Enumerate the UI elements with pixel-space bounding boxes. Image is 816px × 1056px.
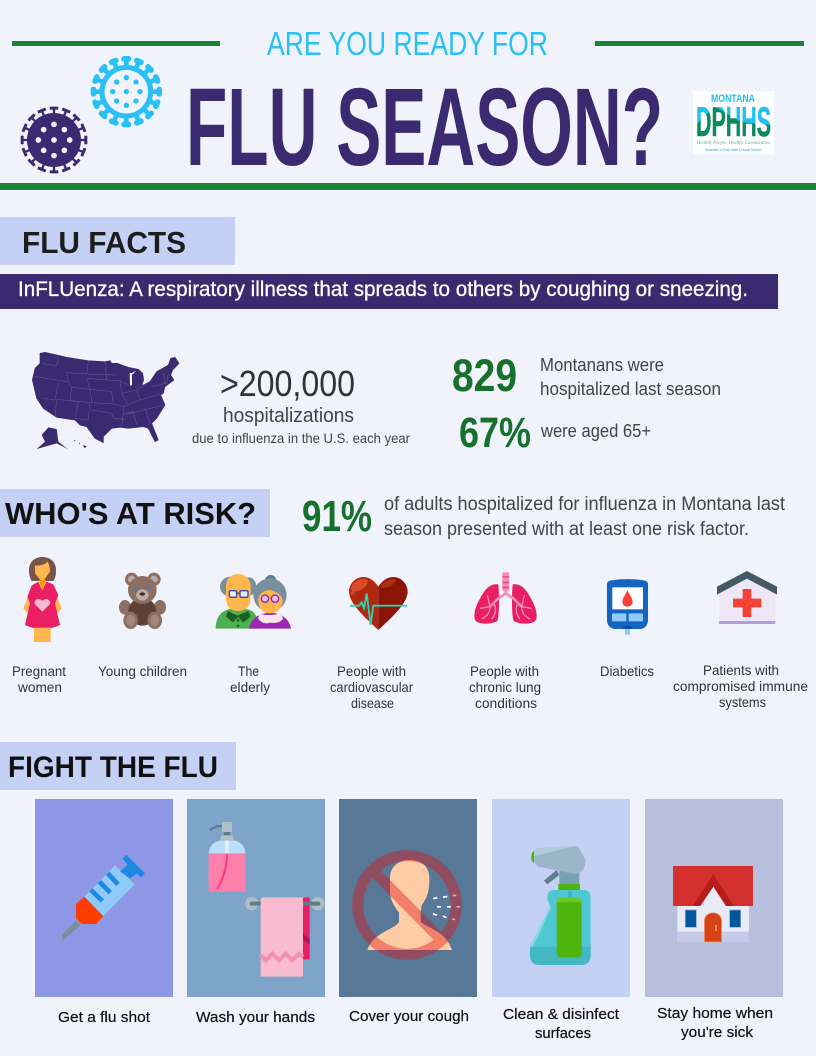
card: wash hands xyxy=(187,799,325,1026)
caption: surfaces xyxy=(535,1025,591,1042)
caption: Wash your hands xyxy=(196,1009,315,1026)
stat: 91 percent: 91% xyxy=(302,492,372,541)
caption: Cover your cough xyxy=(349,1008,469,1025)
stat: 829 Montanans: 829 xyxy=(452,350,517,401)
stat: 91 percent: season presented with at least one risk factor. xyxy=(384,519,749,540)
stat: 67 percent: were aged 65+ xyxy=(540,421,651,441)
logo: Montana DPHHS: MONTANA xyxy=(711,93,755,105)
icon: no coughing xyxy=(358,856,460,954)
labels: risk groups: chronic lung xyxy=(469,679,541,695)
title kicker: ARE YOU READY FOR xyxy=(267,25,548,62)
labels: risk groups xyxy=(12,662,808,711)
caption: Clean & disinfect xyxy=(503,1006,620,1023)
card: flu shot xyxy=(35,799,173,1026)
card: cover cough xyxy=(339,799,477,1025)
icon: house xyxy=(673,866,753,942)
heading: who's at risk: WHO'S AT RISK? xyxy=(5,496,256,531)
stat: 67 percent: 67% xyxy=(459,409,531,457)
stat: 91 percent xyxy=(302,492,786,541)
panel: flu facts xyxy=(0,217,778,457)
icon: elderly couple xyxy=(216,574,291,629)
heading: flu facts: FLU FACTS xyxy=(22,225,186,260)
labels: risk groups: women xyxy=(17,679,62,695)
labels: risk groups: Diabetics xyxy=(600,663,654,679)
logo: Montana DPHHS xyxy=(693,91,774,154)
heading: flu facts xyxy=(0,217,235,265)
logo: Montana DPHHS: Department of Public Health & Human Services xyxy=(705,148,761,152)
card: stay home xyxy=(645,799,783,1041)
icon: purple virus xyxy=(21,107,87,173)
definition banner: InFLUenza: A respiratory illness that spreads to others by coughing or sneezing. xyxy=(18,278,748,301)
icon: heart with ECG xyxy=(349,576,408,630)
stat: 91 percent: of adults hospitalized for influenza in Montana last xyxy=(384,494,786,515)
heading: fight the flu: FIGHT THE FLU xyxy=(8,751,218,784)
labels: risk groups: conditions xyxy=(475,695,537,711)
caption: Get a flu shot xyxy=(58,1009,151,1026)
icon: spray bottle xyxy=(530,846,591,965)
icon: pregnant woman xyxy=(23,557,62,642)
icon: hospital xyxy=(717,571,777,624)
map: United States xyxy=(32,352,179,449)
stat: 67 percent xyxy=(459,409,651,457)
stat: 200,000 hospitalizations xyxy=(192,363,410,446)
labels: risk groups: elderly xyxy=(230,679,270,695)
labels: risk groups: Pregnant xyxy=(12,663,66,679)
labels: risk groups: compromised immune xyxy=(673,678,808,694)
stat: 829 Montanans xyxy=(452,350,721,401)
heading: fight the flu xyxy=(0,742,236,790)
logo: Montana DPHHS: Healthy People. Healthy Communities. xyxy=(696,141,771,146)
icon: lungs xyxy=(474,572,537,624)
icon: teddy bear xyxy=(119,573,166,629)
caption: Stay home when xyxy=(657,1005,773,1022)
panel: fight the flu xyxy=(0,742,783,1042)
stat: 829 Montanans: Montanans were xyxy=(540,355,664,375)
heading: who's at risk xyxy=(0,489,270,537)
icon: blue virus xyxy=(91,56,162,127)
panel: who's at risk xyxy=(0,489,808,711)
icon: syringe xyxy=(62,855,145,941)
definition banner xyxy=(0,274,778,309)
labels: risk groups: People with xyxy=(337,663,406,679)
labels: risk groups: disease xyxy=(351,695,394,711)
panel: header xyxy=(0,25,816,190)
labels: risk groups: The xyxy=(238,663,259,679)
labels: risk groups: systems xyxy=(719,694,766,710)
icon: glucose meter xyxy=(607,579,648,635)
stat: 200,000 hospitalizations: hospitalizations xyxy=(223,405,354,427)
stat: 829 Montanans: hospitalized last season xyxy=(540,379,721,399)
stat: 200,000 hospitalizations: >200,000 xyxy=(220,363,355,404)
labels: risk groups: Patients with xyxy=(703,662,779,678)
labels: risk groups: Young children xyxy=(98,663,187,679)
stat: 200,000 hospitalizations: due to influenza in the U.S. each year xyxy=(192,430,410,446)
card: clean surfaces xyxy=(492,799,630,1042)
labels: risk groups: People with xyxy=(470,663,539,679)
caption: you're sick xyxy=(681,1024,754,1041)
labels: risk groups: cardiovascular xyxy=(330,679,413,695)
caption xyxy=(503,1006,620,1042)
icon: soap and towel xyxy=(209,822,324,977)
caption xyxy=(657,1005,773,1041)
